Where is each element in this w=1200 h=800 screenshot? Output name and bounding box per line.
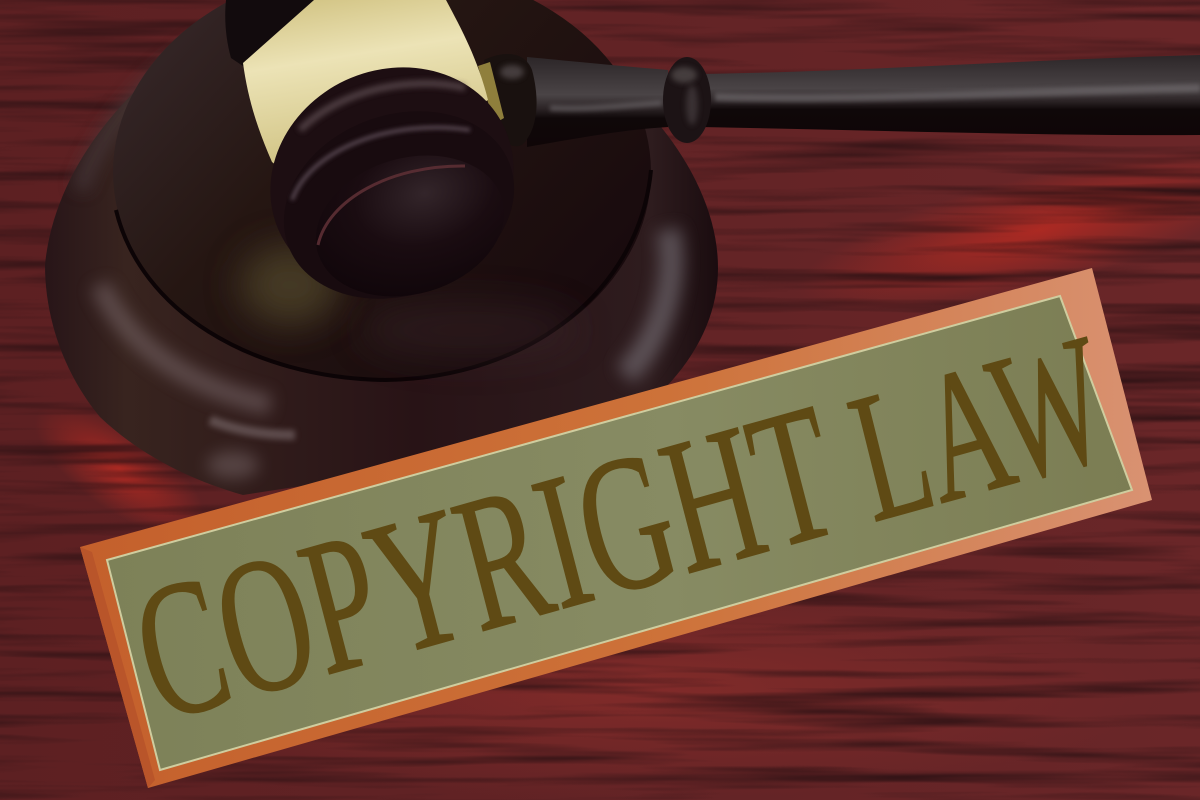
gavel head face (257, 80, 541, 330)
knob highlights (671, 67, 698, 125)
rear ring highlight (300, 83, 465, 130)
block top rim sheen (480, 8, 645, 115)
shaft highlight (715, 88, 1200, 98)
block lower sheen (210, 420, 295, 435)
long shaft (700, 55, 1200, 135)
gavel end cap (299, 134, 521, 318)
face highlight (292, 127, 470, 200)
gavel handle (478, 54, 1200, 147)
reflection on block top (240, 245, 340, 325)
nameplate (80, 268, 1152, 788)
block bottom bright spot (207, 451, 259, 479)
gavel head rear ring (233, 28, 551, 332)
sound block (45, 0, 718, 495)
left edge strip of plaque (80, 547, 155, 788)
gavel (225, 0, 1200, 332)
block outer body (45, 0, 718, 495)
plate text: copyright: COPYRIGHT (115, 363, 857, 763)
block lower-left sheen (100, 285, 270, 405)
wooden plaque frame (80, 268, 1152, 788)
plate text: law: LAW (834, 296, 1126, 562)
collar bulb (484, 54, 537, 146)
knob (663, 57, 711, 143)
neck highlight (550, 103, 662, 108)
end cap edge highlight (318, 166, 465, 245)
block top face (113, 0, 651, 380)
brass band (243, 0, 488, 200)
neck (527, 57, 668, 147)
block top face rim groove (116, 170, 651, 380)
gavel head back section (225, 0, 320, 66)
block right sheen (625, 230, 671, 375)
brass plate (107, 296, 1132, 770)
collar highlight (500, 65, 524, 79)
brass ferrule (478, 62, 504, 124)
